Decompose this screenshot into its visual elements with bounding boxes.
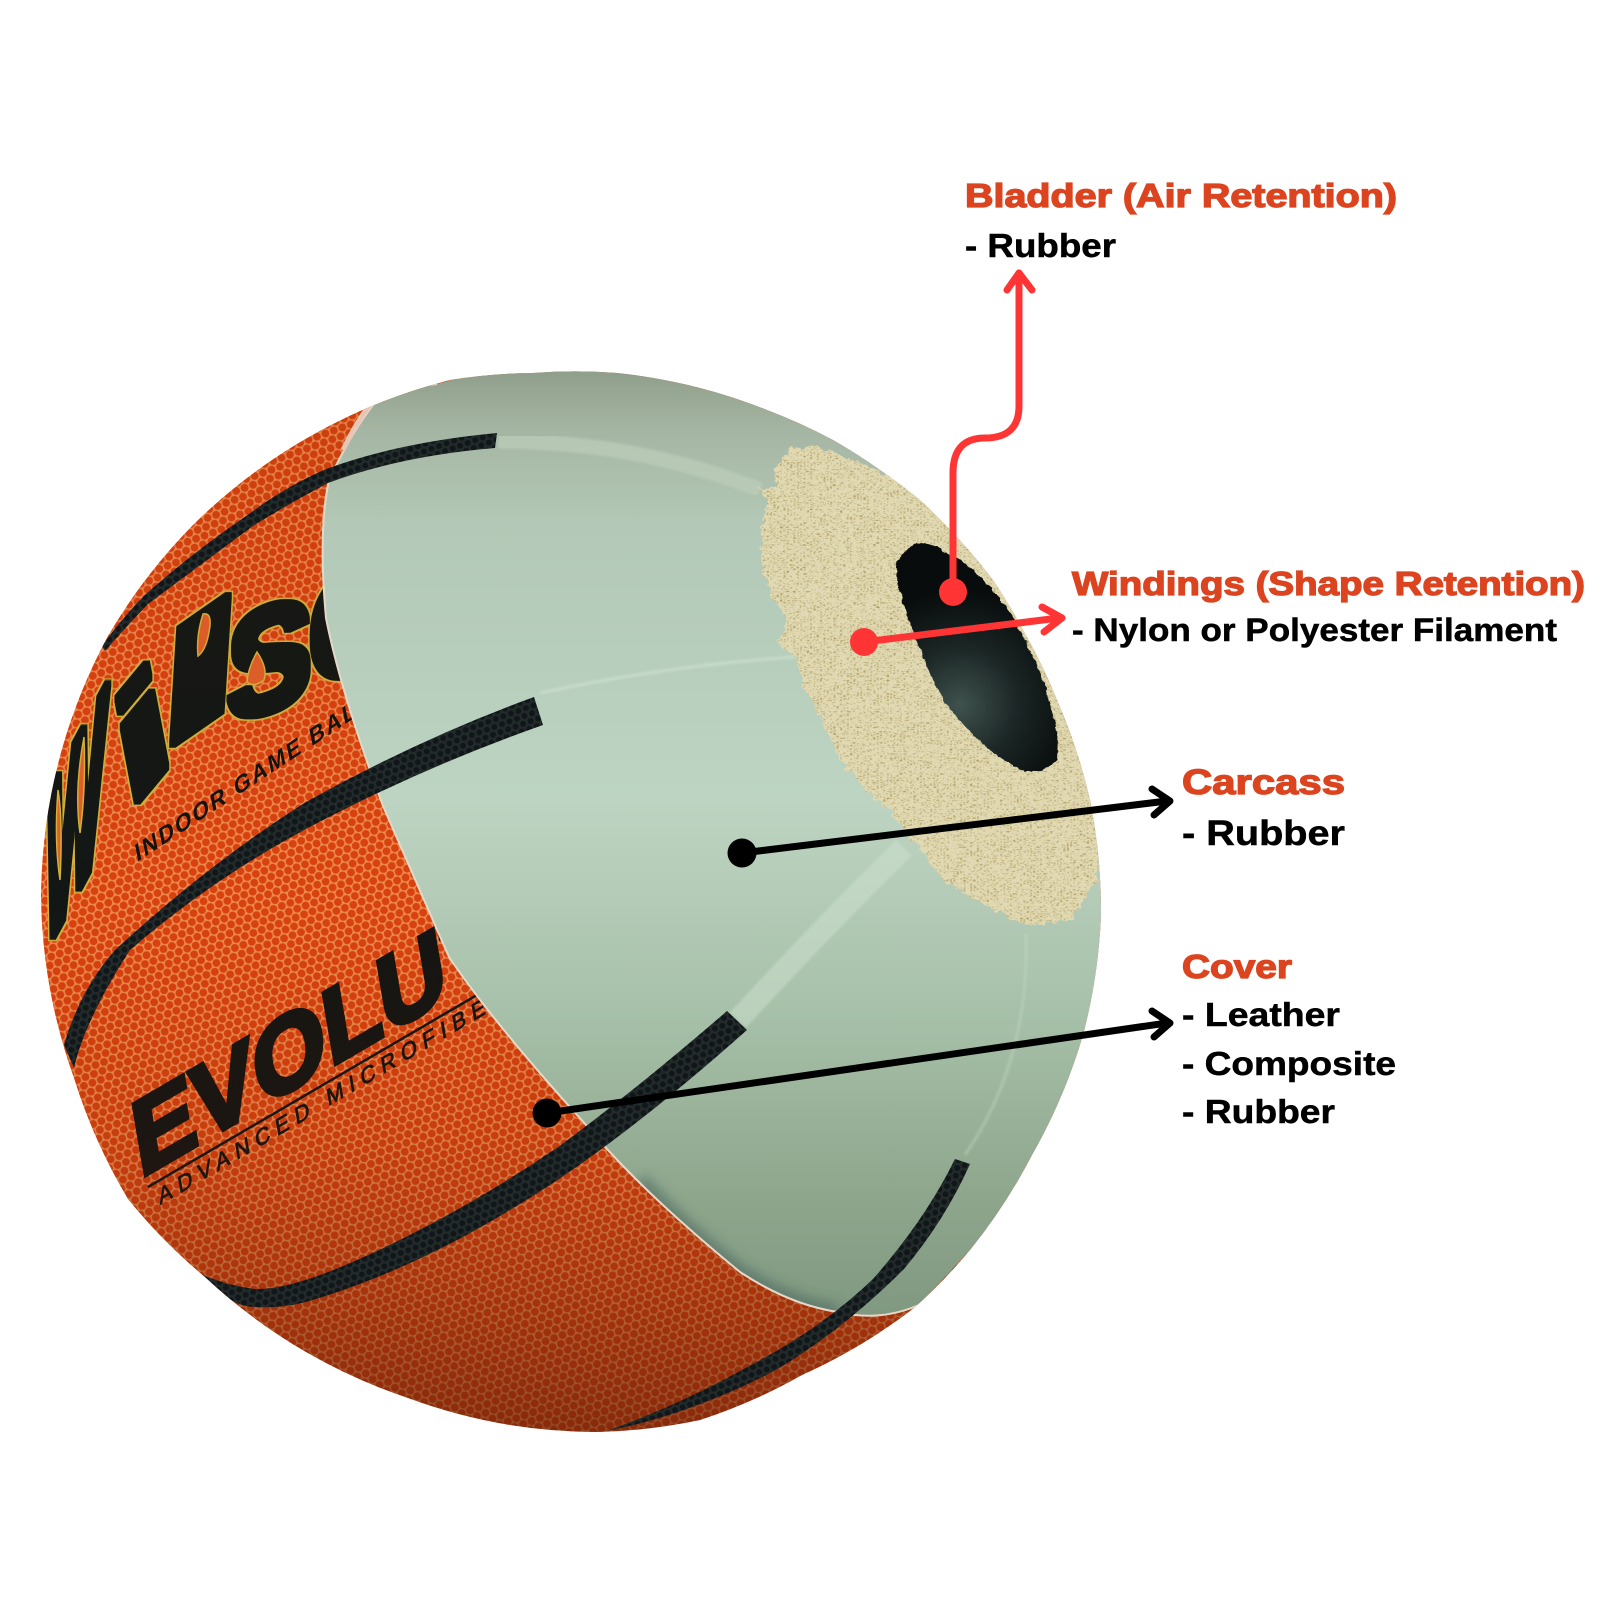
cut edge of cover	[323, 384, 919, 1316]
leather cover	[30, 360, 1110, 1440]
label: windings	[1072, 565, 1585, 648]
text: Evolution: EVOLUTION	[124, 780, 669, 1201]
seam: lower	[738, 848, 904, 1020]
label: cover: - Leather	[1182, 996, 1340, 1033]
label: bladder: Bladder (Air Retention)	[965, 177, 1397, 214]
label: windings: - Nylon or Polyester Filament	[1072, 612, 1557, 648]
logo: Wilson script: o	[304, 480, 409, 733]
logo: Wilson script: l	[145, 548, 256, 796]
arrow: windings	[850, 607, 1062, 656]
logo: Wilson script: s	[222, 519, 318, 769]
strip: top	[102, 433, 497, 651]
label: bladder: - Rubber	[965, 227, 1116, 264]
logo: Wilson script	[46, 586, 341, 942]
label: carcass	[1182, 763, 1345, 853]
label: bladder	[965, 177, 1397, 264]
strip: middle	[64, 697, 543, 1068]
arrow: cover	[532, 1011, 1170, 1128]
logo: Wilson script: i	[98, 619, 187, 850]
leather shading	[56, 380, 1012, 1432]
strip: bottom right	[606, 1159, 970, 1431]
label: cover	[1182, 948, 1396, 1130]
logo: Wilson script: W	[39, 630, 111, 1010]
cut edge: pink top	[343, 382, 437, 450]
seam: right	[965, 934, 1026, 1155]
carcass lower edge shadow	[640, 1180, 838, 1312]
carcass	[300, 360, 1120, 1340]
label: carcass: Carcass	[1182, 763, 1345, 802]
bladder hole	[895, 543, 1058, 772]
label: carcass: - Rubber	[1182, 814, 1345, 853]
windings patch	[758, 447, 1105, 925]
logo letter counters	[56, 614, 265, 880]
seam: top	[498, 441, 760, 490]
seam: middle	[540, 657, 795, 693]
label: cover: - Composite	[1182, 1045, 1396, 1082]
arrow: bladder	[939, 273, 1032, 606]
basketball	[30, 360, 1120, 1440]
label: cover: Cover	[1182, 948, 1292, 985]
strip: lower	[201, 1011, 747, 1307]
arrow: carcass	[728, 789, 1170, 868]
text: advanced microfiber: ADVANCED MICROFIBER	[156, 977, 513, 1210]
label: cover: - Rubber	[1182, 1093, 1335, 1130]
text: indoor game ball: INDOOR GAME BALL	[133, 685, 374, 868]
infographic: basketball anatomy	[41, 182, 1584, 1432]
label: windings: Windings (Shape Retention)	[1072, 565, 1585, 602]
